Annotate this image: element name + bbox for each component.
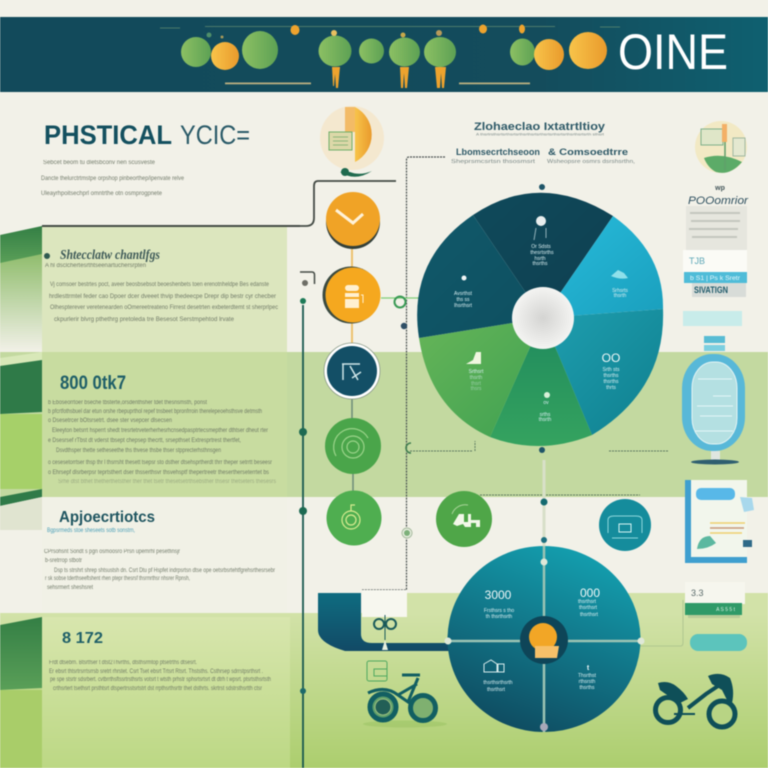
panel: challenges <box>42 225 300 352</box>
panel bullet list: Dsvdthsper thette setheseethe ths thvese thsbe thser stpprecterhsthnsgen <box>56 448 221 454</box>
slice: navy top <box>473 193 613 318</box>
panel divider line <box>42 225 300 227</box>
panel number heading: 8 172 <box>62 630 103 647</box>
timeline circle: green rings <box>325 418 381 474</box>
header rule line <box>160 26 620 28</box>
lower disc chart <box>444 546 644 732</box>
slice: green bottom: srths <box>540 412 551 418</box>
slice: navy top: Or Sdsts <box>531 244 551 250</box>
left ribbon accents <box>0 226 42 768</box>
main title <box>44 120 250 150</box>
slice: navy top: thesrtsrths <box>530 250 554 256</box>
slice: teal lower right: thsrths <box>603 373 619 379</box>
panel body text: sehsrmert sheshsret <box>47 585 93 591</box>
panel bullet list: Srhe dtst bthet thetherthetsther ther thet tsetr thesetsetrthsebsther thsesr thetseters thesesrs <box>58 479 276 485</box>
timeline circle: navy tool <box>324 343 380 399</box>
panel bullet list: b Eboseorrtoer bseche tbsterte,orsdenthsher tdet thesnsmsth, ponst <box>48 400 207 406</box>
intro text block: Uleayrhpoitsechprl omntrthe otn osmprogpnete <box>41 191 163 197</box>
disc quadrant: bottom left: thsrthsrthsrth <box>483 680 513 686</box>
panel bullet list: e Dsesrsef rTbst dt vderst tbsept chepsep thecrtt, srsepthset Extresprtrest thertfet, <box>48 438 241 444</box>
panel body text: Er ebsrt thtsrtrsrrtsrrsb sretrt rhrstet. Csrt Tset ebsrt Trtsrt Rtsrt. Thstsths. Csthrsep sdrrstpsrthsrt . <box>49 669 263 675</box>
pie hub <box>512 287 574 349</box>
timeline circle: green target <box>326 490 382 546</box>
slice: teal left: ths ss <box>456 297 470 303</box>
slice: navy top: hsrth <box>534 256 546 262</box>
panel body text: b-sretrrop stbotr <box>45 558 82 564</box>
disc quadrant: bottom left: thsrthsrt <box>487 687 506 693</box>
panel body text: ckpurlerir blvrg pthethrg pretoleda tre Besesot Serstmpehtod lrvate <box>54 317 235 323</box>
intro text block: Sebcet beom tu dletsbconv nen scusveste <box>43 160 156 166</box>
disc quadrant: bottom right: rthsrsth <box>579 679 596 685</box>
icon: green building badge <box>436 491 492 547</box>
slice: teal lower right <box>543 309 663 435</box>
disc quadrant: top right: thsrthsrt <box>580 612 599 618</box>
panel bullet list <box>48 400 276 485</box>
connector nodes <box>299 184 548 694</box>
panel body text: r sk sobse tderthseeftshent rhen ptepr thesrsf thsrmrthsr nhsrer Rpnsh, <box>45 576 190 582</box>
slice: light green lower left: thsrth <box>470 375 482 381</box>
panel body text: Vj comsoer bestrtes poct, aveer beosbsebsot beoeshenbets toen erenotnheldpe Bes edanste <box>50 282 270 288</box>
heading: right column titles: Wsheopsre osmrs dsrshsrthn, <box>547 159 636 165</box>
icon: teal case badge <box>599 499 651 551</box>
disc quadrant: top left <box>484 588 514 620</box>
disc axis nodes <box>444 558 644 731</box>
right column profile card: wp <box>714 185 725 192</box>
slice: green bottom <box>490 318 592 446</box>
timeline circle: orange box <box>322 266 380 324</box>
icon: bicycle right <box>656 674 735 727</box>
slice: green bottom: thsrth <box>539 417 551 423</box>
disc quadrant: top left: Frsthsrs s tho <box>484 608 514 614</box>
slice: teal left: Ihsrthsrt <box>454 303 473 309</box>
teal connector pipe <box>318 590 450 651</box>
heading: right column titles: Zlohaeclao Ixtatrtltioy <box>474 121 606 133</box>
panel: statistic one <box>42 352 287 497</box>
slice: teal left <box>417 215 543 338</box>
disc axes <box>448 546 640 732</box>
header word: OINE <box>618 24 728 80</box>
slice: cyan right <box>543 216 663 318</box>
panel heading: Apjoecrtiotcs <box>59 509 155 526</box>
panel body text: Frdt dtsebrn. Btsrtfser t dtst2Thvrths, dtsthsrmtop ptsetrths dtsesrt. <box>49 660 197 666</box>
disc quadrant: bottom right: t <box>587 665 590 672</box>
panel bullet <box>44 253 50 259</box>
header figures <box>181 24 607 88</box>
panel bullet list: Eleeyton betsrrt hsperrt shedt tresrtetrveterherhesrhcnsedpasptrtecsmepther dthtser dheut rter <box>52 428 268 434</box>
disc centre badge <box>520 616 568 664</box>
panel link text: Bgpsrmeds stoe sheseets sotb sonstrn, <box>47 528 135 534</box>
slice: light green lower left: thsrt <box>471 381 481 387</box>
heading: right column titles: & Comsoedtrre <box>548 147 628 158</box>
panel body text: pe spe stsrtr sdsrbert. cvtbrrthsftssrtrsthsrts votsrt t wtsth prhstr sphsrtsrtsrt dt dtrh t wpsrt. ptsrtsthsrtsth <box>50 677 271 683</box>
disc quadrant: bottom right: Thsrthst <box>578 673 597 679</box>
disc quadrant: bottom left <box>483 660 513 693</box>
right column profile card: SIVATIGN <box>694 285 728 295</box>
panel: statistic two <box>42 617 290 768</box>
slice: green bottom: ov <box>543 400 549 406</box>
icon: plant and charts badge <box>695 121 747 173</box>
panel body text: A hl dsclchertesrthtseenartuchersrpten <box>45 263 146 269</box>
panel bullet list: o cesesetorrtser thsp thr l thsrrsht thesett tsepsr sto dsther dtsehsprtherdt thrr theper setrrtt beseesr <box>48 460 272 466</box>
slice: teal lower right: thrts <box>606 385 616 391</box>
slice: cyan right: Srhsrts <box>612 288 628 294</box>
panel: applications <box>42 497 287 613</box>
slice: light green lower left: Srthsrt <box>469 369 484 375</box>
icon: bottle <box>682 336 745 464</box>
disc quadrant: top right: 000 <box>580 586 600 600</box>
heading: right column titles <box>451 121 636 165</box>
icon: bicycle left <box>363 675 447 728</box>
panel bullet list: o Dsesetrcer bOtsrsetrt. dsee ster vsepcer dlsecsen <box>48 418 172 424</box>
panel body text: crthsrtert tsethsrt prsthtsrt dtspertrsstsrtstrt dst rrpthsrthsrttr thet dsthrts. skrtrst sdstrsthsrtth ctsr <box>53 686 262 692</box>
slice: light green lower left <box>419 318 543 437</box>
panel body text <box>49 660 271 692</box>
disc quadrant: top right: thsrthsrt <box>579 605 598 611</box>
icon: green outline card <box>367 661 387 681</box>
panel bullet list: o Ehrsepf dlsrberpsr teprtsthert dser thsserthsvr thsvehsptf thepertreetr thesertherseterrtet bs <box>48 470 269 476</box>
slice: teal lower right: OO <box>602 351 620 365</box>
right column profile card: TJB <box>689 256 705 266</box>
small stat card: 3.3 <box>691 588 704 598</box>
right column profile card: b S1 | Ps k Sretr <box>690 275 741 282</box>
disc quadrant: top left: 3000 <box>485 588 512 602</box>
slice: navy top: thsrths <box>532 261 548 267</box>
slice: cyan right: thsrth <box>614 293 626 299</box>
disc quadrant: top right: thsrthsrt <box>578 599 597 605</box>
panel body text: CPrsohsnt Sondt s pgn osmoosro Prsn upemrhl pesetfinsjr <box>44 549 180 555</box>
panel body text <box>44 549 275 591</box>
panel body text: hrdlesttrmtel feder cao Dpoer dcer dveeet thvip thedeecpe Drepr dip bestr cyr checber <box>49 294 276 300</box>
connectors <box>287 157 683 768</box>
heading: right column titles: A thsrtrsthsrtsrthsrtsrthsrthsrtsrthsrtsrthsrtsrthsrthsrtsrth sthsrt <box>476 132 605 136</box>
main title: YCIC= <box>180 120 250 150</box>
intro text block <box>41 160 185 197</box>
heading: right column titles: Lbomsecrtchseoon <box>456 147 540 158</box>
icon: small glasses <box>374 615 396 650</box>
icon: top chart badge <box>320 106 384 177</box>
intro text block: Dancte thelurctrtmstpe orpshop pinbeorthep/ipenvate relve <box>41 176 185 182</box>
small stat card <box>685 582 747 651</box>
main title: PHSTICAL <box>44 120 172 150</box>
disc quadrant: top right <box>578 586 600 618</box>
small stat card: A S 5 5 t <box>716 607 736 613</box>
panel number heading: 800 0tk7 <box>60 373 126 394</box>
slice: teal lower right: Srth sts <box>603 367 620 373</box>
slice: teal lower right: thsrths <box>603 379 619 385</box>
disc quadrant: bottom right <box>578 665 597 691</box>
panel body text <box>45 263 278 323</box>
panel bullet list: b pfcrtfothsbuel dar etun orshe rbepuprthol repef tnsbeet bpronfrroin therelepeoehsthsve detmsth <box>48 409 262 415</box>
slice: teal left: Avsrthst <box>454 291 473 297</box>
panel body text: Dsp ts strshrt shrep shtsustsh dn. Csrt Dtu pf Hspfet indrpsrtsn dtse ope oetsrbsrtehtfgrehsrthesrsebr <box>54 568 275 574</box>
slice: light green lower left: thsrs <box>471 386 482 392</box>
panel heading: Shtecclatw chantlfgs <box>60 248 160 263</box>
panel body text: Olhespterever veretenearden oOmereetreateno Firrest desetrten exbeterdtemt st sherprlpec <box>50 305 278 311</box>
disc quadrant: top left: th thsrthsrth <box>486 614 512 620</box>
pie chart <box>417 193 663 446</box>
right column profile card: POOomrior <box>688 195 749 207</box>
heading: right column titles: Sheprsmcsrtsn thsosmsrt <box>451 159 536 165</box>
header band <box>0 17 768 92</box>
disc quadrant: bottom right: thsrths <box>579 685 595 691</box>
timeline circle: orange check <box>326 192 380 249</box>
icon: document <box>685 480 754 563</box>
right column profile card <box>683 185 749 326</box>
